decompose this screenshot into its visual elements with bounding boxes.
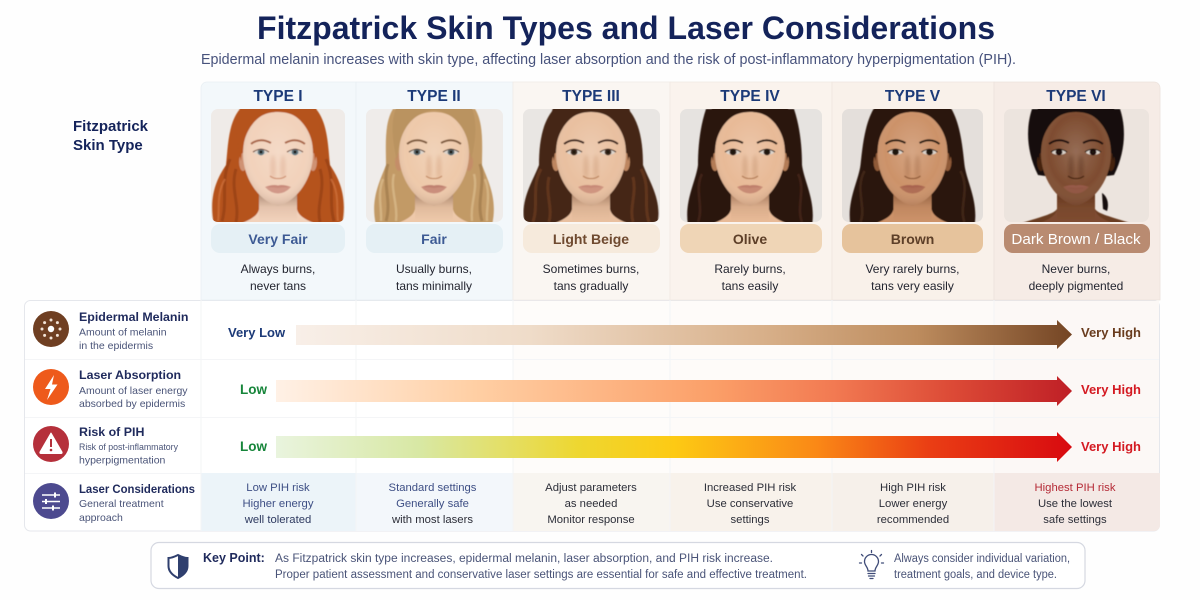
side note: treatment goals, and device type. bbox=[894, 569, 1057, 581]
burn response: Type V: Very rarely burns, bbox=[865, 262, 960, 276]
recommendations: Type V: Lower energy bbox=[879, 498, 948, 510]
label: Dark Brown / Black bbox=[1004, 224, 1150, 253]
burn response: Type V: tans very easily bbox=[871, 279, 954, 293]
recommendations: Type III: Adjust parameters bbox=[545, 482, 637, 494]
arrow: melanin gradient bbox=[296, 320, 1072, 349]
heading: Type VI: TYPE VI bbox=[1046, 88, 1106, 105]
label: laser considerations text bbox=[79, 482, 195, 524]
recommendations: Type V: recommended bbox=[877, 514, 949, 526]
label: Light Beige: Light Beige bbox=[553, 231, 629, 247]
label: Dark Brown / Black: Dark Brown / Black bbox=[1011, 231, 1141, 248]
burn response: Type I: Always burns, bbox=[241, 262, 315, 276]
scale start: Low: Low bbox=[240, 439, 267, 454]
label: epidermal melanin bbox=[79, 310, 188, 352]
recommendations: Type II: Standard settings bbox=[389, 482, 477, 494]
portrait: Type II bbox=[366, 108, 503, 225]
burn response: Type III bbox=[543, 262, 639, 293]
recommendations: Type I: Low PIH risk bbox=[246, 482, 310, 494]
burn response: Type IV: Rarely burns, bbox=[714, 262, 786, 276]
heading: Type IV: TYPE IV bbox=[720, 88, 780, 105]
recommendations: Type III: Monitor response bbox=[547, 514, 635, 526]
panel: Type III column bbox=[513, 82, 670, 300]
icon: sliders bbox=[33, 483, 69, 519]
burn response: Type VI: deeply pigmented bbox=[1029, 279, 1123, 293]
portrait: Type VI bbox=[1004, 108, 1149, 223]
callout: key point bbox=[151, 542, 1085, 588]
recommendations: Type II bbox=[389, 482, 477, 526]
heading: Type III: TYPE III bbox=[562, 88, 620, 105]
burn response: Type IV: tans easily bbox=[722, 279, 778, 293]
panel: Type VI column bbox=[994, 82, 1160, 300]
recommendations: Type IV: settings bbox=[731, 514, 770, 526]
heading: Type I: TYPE I bbox=[253, 88, 303, 105]
burn response: Type II bbox=[396, 262, 472, 293]
scale start: Very Low: Very Low bbox=[228, 325, 286, 340]
scale end: Very High: Very High bbox=[1081, 439, 1141, 454]
recommendations: Type III: as needed bbox=[565, 498, 617, 510]
icon: lightning bolt bbox=[33, 369, 69, 405]
burn response: Type IV bbox=[714, 262, 786, 293]
arrow: absorption gradient bbox=[276, 376, 1072, 406]
burn response: Type II: Usually burns, bbox=[396, 262, 472, 276]
label: laser considerations text: approach bbox=[79, 512, 123, 524]
key point message bbox=[275, 553, 807, 581]
label: epidermal melanin: Epidermal Melanin bbox=[79, 310, 188, 324]
label: epidermal melanin: Amount of melanin bbox=[79, 326, 167, 338]
recommendations: Type V: High PIH risk bbox=[880, 482, 946, 494]
label: epidermal melanin: in the epidermis bbox=[79, 340, 153, 352]
recommendations: Type III bbox=[545, 482, 637, 526]
scale end: Very High: Very High bbox=[1081, 325, 1141, 340]
burn response: Type III: tans gradually bbox=[554, 279, 628, 293]
recommendations: Type VI: Highest PIH risk bbox=[1035, 482, 1116, 494]
subtitle: Epidermal melanin increases with skin type, affecting laser absorption and the risk of post-inflammatory hyperpigmentation (PIH). bbox=[201, 52, 1016, 68]
panel: Type V column bbox=[832, 82, 994, 300]
burn response: Type I bbox=[241, 262, 315, 293]
label: laser absorption bbox=[79, 368, 188, 410]
row heading: Fitzpatrick Skin Type: Fitzpatrick bbox=[73, 118, 149, 135]
panel: Type I column bbox=[201, 82, 356, 300]
title: Fitzpatrick Skin Types and Laser Considerations bbox=[257, 10, 995, 46]
recommendations: Type V bbox=[877, 482, 949, 526]
scale end: Very High: Very High bbox=[1081, 382, 1141, 397]
side note bbox=[894, 553, 1070, 581]
recommendations: Type VI bbox=[1035, 482, 1116, 526]
recommendations: Type VI: safe settings bbox=[1043, 514, 1107, 526]
icon: shield bbox=[168, 555, 188, 578]
key point message: As Fitzpatrick skin type increases, epidermal melanin, laser absorption, and PIH risk increase. bbox=[275, 553, 773, 565]
heading: Type II: TYPE II bbox=[407, 88, 461, 105]
scale start: Low: Low bbox=[240, 382, 267, 397]
burn response: Type II: tans minimally bbox=[396, 279, 472, 293]
row: laser absorption bbox=[33, 368, 1141, 410]
icon: warning triangle bbox=[33, 426, 69, 462]
key point message: Proper patient assessment and conservative laser settings are essential for safe and effective treatment. bbox=[275, 569, 807, 581]
panel: Type IV column bbox=[670, 82, 832, 300]
table panel bbox=[24, 300, 1160, 531]
recommendations: Type IV: Use conservative bbox=[707, 498, 793, 510]
label: laser absorption: Laser Absorption bbox=[79, 368, 181, 382]
panel: Type II column bbox=[356, 82, 513, 300]
label: risk of PIH bbox=[79, 425, 178, 466]
portrait: Type V bbox=[842, 108, 983, 225]
recommendations: Type I bbox=[243, 482, 314, 526]
portrait: Type III bbox=[523, 108, 660, 225]
recommendations: Type II: Generally safe bbox=[396, 498, 469, 510]
label: Very Fair: Very Fair bbox=[248, 231, 308, 247]
label: laser absorption: absorbed by epidermis bbox=[79, 398, 185, 410]
label: laser absorption: Amount of laser energy bbox=[79, 385, 188, 397]
row heading: Fitzpatrick Skin Type bbox=[73, 118, 149, 154]
label: risk of PIH: Risk of PIH bbox=[79, 425, 144, 439]
label: Fair bbox=[366, 224, 503, 253]
recommendations: Type I: Higher energy bbox=[243, 498, 314, 510]
label: Key Point: Key Point: bbox=[203, 551, 265, 565]
label: Fair: Fair bbox=[421, 231, 447, 247]
label: Olive bbox=[680, 224, 822, 253]
burn response: Type III: Sometimes burns, bbox=[543, 262, 639, 276]
burn response: Type I: never tans bbox=[250, 279, 306, 293]
icon: light bulb bbox=[860, 550, 884, 578]
row: risk of PIH bbox=[33, 425, 1141, 466]
portrait: Type I bbox=[211, 108, 345, 225]
row heading: Fitzpatrick Skin Type: Skin Type bbox=[73, 137, 143, 154]
label: Brown bbox=[842, 224, 983, 253]
label: Brown: Brown bbox=[891, 231, 934, 247]
burn response: Type V bbox=[865, 262, 960, 293]
label: risk of PIH: hyperpigmentation bbox=[79, 454, 166, 466]
label: laser considerations text: General treatment bbox=[79, 498, 164, 510]
row: epidermal melanin bbox=[33, 310, 1141, 352]
recommendations: Type IV: Increased PIH risk bbox=[704, 482, 796, 494]
recommendations: Type I: well tolerated bbox=[244, 514, 311, 526]
label: risk of PIH: Risk of post-inflammatory bbox=[79, 442, 178, 452]
recommendations: Type II: with most lasers bbox=[391, 514, 473, 526]
arrow: PIH risk gradient bbox=[276, 432, 1072, 462]
label: Olive: Olive bbox=[733, 231, 767, 247]
panel: laser considerations row bbox=[25, 300, 1160, 531]
label: Very Fair bbox=[211, 224, 345, 253]
side note: Always consider individual variation, bbox=[894, 553, 1070, 565]
label: Light Beige bbox=[523, 224, 660, 253]
row label: laser considerations bbox=[33, 482, 195, 524]
heading: Type V: TYPE V bbox=[885, 88, 941, 105]
icon: melanin granules bbox=[33, 311, 69, 347]
burn response: Type VI bbox=[1029, 262, 1123, 293]
burn response: Type VI: Never burns, bbox=[1042, 262, 1110, 276]
recommendations: Type VI: Use the lowest bbox=[1038, 498, 1113, 510]
label: laser considerations text: Laser Considerations bbox=[79, 482, 195, 496]
portrait: Type IV bbox=[680, 108, 822, 225]
recommendations: Type IV bbox=[704, 482, 796, 526]
